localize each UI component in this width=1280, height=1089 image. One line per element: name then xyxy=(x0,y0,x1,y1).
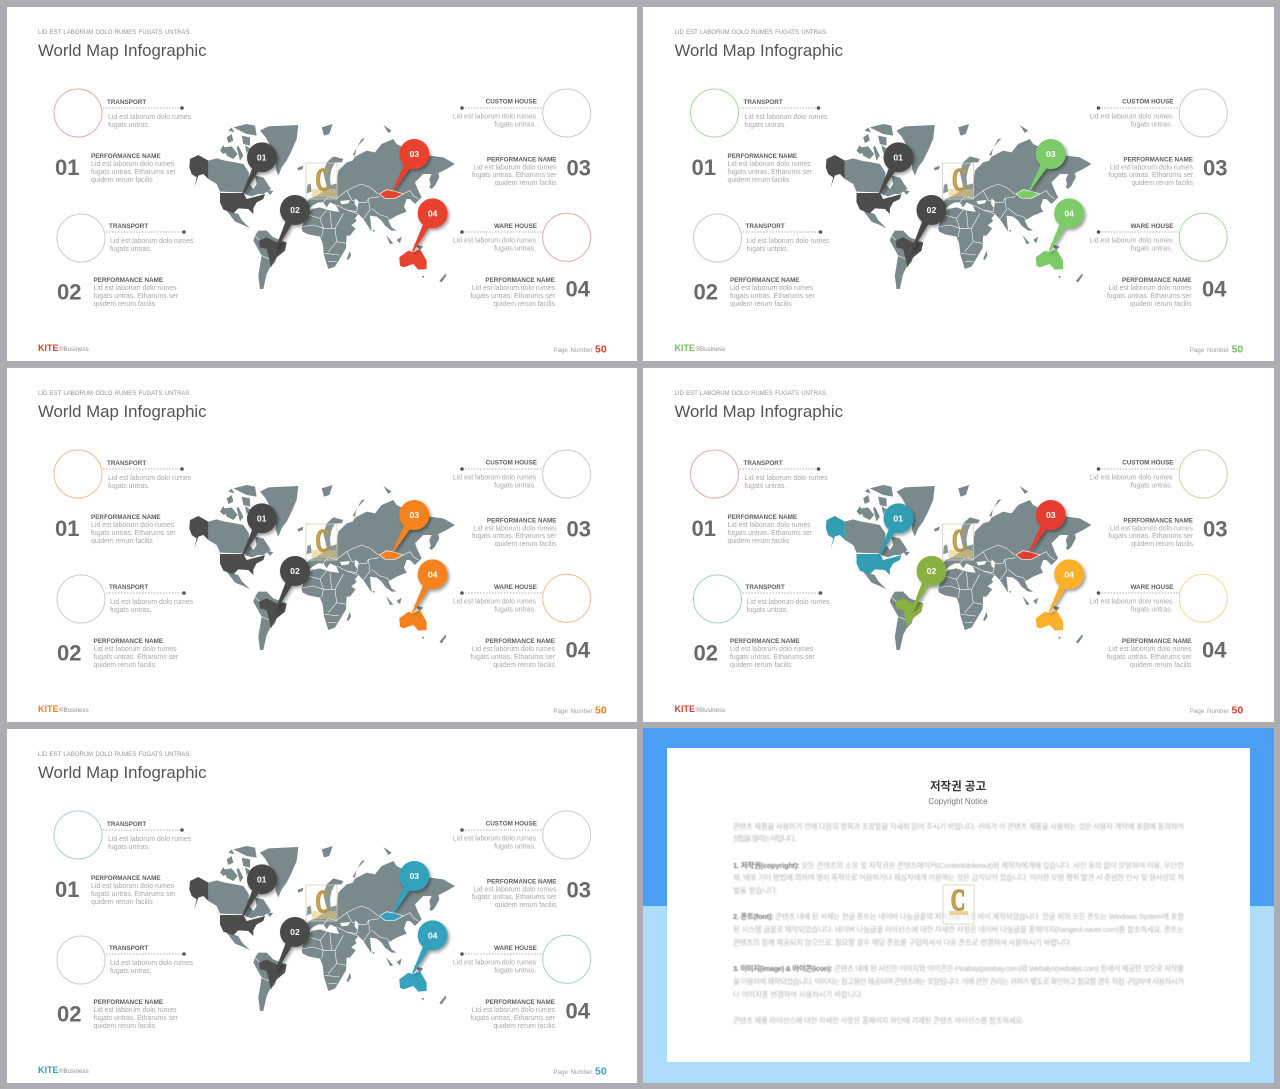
block: performance 02: Lid est laborum dolo rumes xyxy=(94,285,177,292)
block: performance 03: PERFORMANCE NAME xyxy=(1123,518,1193,524)
page number xyxy=(553,344,607,356)
callout: transport 2: fugats untras. xyxy=(110,246,152,253)
block: performance 02: quidem rerum facilis xyxy=(94,301,156,308)
callout: ware house: Lid est laborum dolo rumes xyxy=(453,960,537,967)
callout: transport 2: Lid est laborum dolo rumes xyxy=(110,599,194,606)
block: performance 03 xyxy=(472,156,591,187)
block: performance 01: PERFORMANCE NAME xyxy=(728,514,797,521)
title: World Map Infographic xyxy=(674,402,843,421)
callout: ware house: WARE HOUSE xyxy=(494,945,537,952)
block: performance 04: Lid est laborum dolo rumes xyxy=(1108,285,1192,292)
page number: 50 xyxy=(595,1066,607,1078)
block: performance 02: 02 xyxy=(694,280,718,304)
callout: ware house: fugats untras. xyxy=(494,246,536,252)
callout: transport 1 xyxy=(54,89,192,137)
block: performance 03: 03 xyxy=(1203,156,1227,180)
callout: ware house: Lid est laborum dolo rumes xyxy=(453,238,537,245)
callout: ware house: fugats untras. xyxy=(1131,246,1173,252)
footer brand: KITE xyxy=(38,704,59,714)
callout: ware house: fugats untras. xyxy=(1131,606,1173,614)
callout: transport 2: Lid est laborum dolo rumes xyxy=(746,238,830,245)
block: performance 03: fugats untras. Etharums ser xyxy=(472,894,557,901)
block: performance 04: quidem rerum facilis xyxy=(493,301,556,308)
callout: transport 2 xyxy=(694,575,830,623)
footer brand xyxy=(674,704,725,714)
notice text: 제, 배포 기타 방법에 의하여 영리 목적으로 이용하거나 제삼자에게 이용하는 것은 금지되어 있습니다. 이러한 모방 행위 발견 시 준엄한 민사 및 형사상의 처 xyxy=(733,873,1184,882)
world map with pins: 01 xyxy=(893,513,903,523)
block: performance 03: 03 xyxy=(566,878,591,902)
callout: transport 1: Lid est laborum dolo rumes xyxy=(744,475,828,482)
callout: transport 2: TRANSPORT xyxy=(109,584,148,591)
callout: custom house xyxy=(453,89,591,137)
callout: transport 1: Lid est laborum dolo rumes xyxy=(744,114,828,121)
block: performance 01 xyxy=(692,514,813,545)
world map with pins: 02 xyxy=(290,205,300,215)
block: performance 04: 04 xyxy=(566,276,591,302)
callout: ware house xyxy=(453,574,591,622)
block: performance 04 xyxy=(1107,276,1227,308)
block: performance 03: Lid est laborum dolo rumes xyxy=(473,526,557,532)
block: performance 03: 03 xyxy=(566,156,591,180)
page number xyxy=(553,704,607,716)
block: performance 03: PERFORMANCE NAME xyxy=(487,518,556,524)
notice text: 콘텐츠 제품 라이선스에 대한 자세한 사항은 홈페이지 하단에 기재된 콘텐츠 라이선스를 참조하세요. xyxy=(733,1016,1024,1025)
block: performance 01: 01 xyxy=(55,877,79,902)
world map with pins: 03 xyxy=(1046,510,1056,520)
callout: transport 1 xyxy=(690,89,828,137)
block: performance 03: quidem rerum facilis xyxy=(1131,180,1194,187)
block: performance 02 xyxy=(694,638,815,669)
block: performance 04: 04 xyxy=(566,638,591,662)
block: performance 03 xyxy=(472,878,591,909)
block: performance 01: 01 xyxy=(55,516,79,541)
watermark: C xyxy=(952,522,966,558)
block: performance 01: fugats untras. Etharums ser xyxy=(728,169,813,176)
block: performance 02 xyxy=(57,999,179,1030)
watermark xyxy=(942,161,974,199)
title: World Map Infographic xyxy=(38,763,207,782)
callout: ware house: Lid est laborum dolo rumes xyxy=(1089,599,1173,606)
footer brand xyxy=(38,1065,89,1075)
callout: transport 1: fugats untras. xyxy=(744,122,786,129)
block: performance 01: quidem rerum facilis xyxy=(728,538,790,545)
page number xyxy=(553,1066,607,1078)
block: performance 04: 04 xyxy=(1202,638,1227,662)
block: performance 04: PERFORMANCE NAME xyxy=(485,638,555,645)
block: performance 01 xyxy=(55,153,176,184)
block: performance 03 xyxy=(472,516,591,548)
block: performance 02: quidem rerum facilis xyxy=(730,301,792,308)
block: performance 01: fugats untras. Etharums ser xyxy=(91,169,176,176)
block: performance 01: PERFORMANCE NAME xyxy=(728,153,797,160)
callout: ware house: Lid est laborum dolo rumes xyxy=(1089,238,1173,245)
notice text: 성립을 알리는 바입니다. xyxy=(733,834,796,843)
block: performance 02: PERFORMANCE NAME xyxy=(730,638,800,645)
callout: custom house xyxy=(1089,450,1227,498)
callout: custom house: CUSTOM HOUSE xyxy=(486,460,537,466)
block: performance 02: Lid est laborum dolo rumes xyxy=(94,1007,177,1014)
title: World Map Infographic xyxy=(674,41,843,60)
panel: slide 2 green xyxy=(643,7,1274,361)
page number xyxy=(1190,704,1243,716)
footer brand: ®Business xyxy=(59,346,89,353)
block: performance 03: PERFORMANCE NAME xyxy=(1123,156,1193,164)
block: performance 03: PERFORMANCE NAME xyxy=(487,878,556,886)
block: performance 01: PERFORMANCE NAME xyxy=(91,875,161,882)
block: performance 03: 03 xyxy=(1203,516,1227,542)
world map with pins: 02 xyxy=(290,927,300,937)
world map with pins xyxy=(189,124,455,289)
callout: custom house: CUSTOM HOUSE xyxy=(1122,98,1174,106)
block: performance 02: PERFORMANCE NAME xyxy=(730,277,800,284)
notice text: 2. 폰트(font): 콘텐츠 내에 된 서체는 한글 폰트는 네이버 나눔글꼴의 저작권을 가진 바이 제작되었습니다. 한글 외의 모든 폰트는 Windows System에 포함 xyxy=(733,912,1184,921)
callout: custom house xyxy=(453,811,591,859)
callout: ware house xyxy=(1089,574,1227,622)
callout: transport 2: fugats untras. xyxy=(110,607,152,614)
callout: transport 1 xyxy=(690,450,828,498)
footer brand: ®Business xyxy=(696,346,725,353)
footer brand: KITE xyxy=(38,1065,59,1075)
block: performance 04: fugats untras. Etharums ser xyxy=(470,654,556,661)
callout: transport 2: Lid est laborum dolo rumes xyxy=(110,960,194,967)
footer brand xyxy=(38,704,89,714)
page number: 50 xyxy=(1232,344,1243,356)
callout: transport 1: TRANSPORT xyxy=(107,821,146,828)
callout: transport 2 xyxy=(694,214,830,262)
subtitle: LID EST LABORUM DOLO RUMES FUGATS UNTRAS. xyxy=(674,391,828,397)
watermark: C xyxy=(316,883,329,919)
callout: custom house: fugats untras. xyxy=(494,482,536,490)
callout: custom house: Lid est laborum dolo rumes xyxy=(453,474,537,482)
heading: 저작권 공고 xyxy=(930,779,986,793)
block: performance 04: Lid est laborum dolo rumes xyxy=(472,285,556,292)
callout: transport 1: fugats untras. xyxy=(108,844,150,851)
block: performance 02: Lid est laborum dolo rumes xyxy=(730,285,814,292)
footer brand: ®Business xyxy=(59,707,89,714)
block: performance 01: fugats untras. Etharums ser xyxy=(91,891,176,898)
callout: transport 1: fugats untras. xyxy=(744,483,786,490)
world map with pins: 01 xyxy=(893,152,903,162)
world map with pins: 01 xyxy=(257,152,267,162)
block: performance 04: 04 xyxy=(566,998,591,1024)
block: performance 01: Lid est laborum dolo rumes xyxy=(91,883,175,890)
callout: transport 2: fugats untras. xyxy=(746,246,788,253)
notice text: 3. 이미지(image) & 아이콘(icon): 콘텐츠 내에 된 사진은 이미지와 아이콘은 Pixabay(pixabay.com)와 Webalys(webalys.com) 등에서 제공한 것으로 저작물 xyxy=(733,964,1184,973)
callout: transport 1: fugats untras. xyxy=(108,122,150,129)
title: World Map Infographic xyxy=(38,402,207,421)
block: performance 01: Lid est laborum dolo rumes xyxy=(728,161,811,168)
callout: ware house: WARE HOUSE xyxy=(494,584,537,591)
block: performance 02 xyxy=(694,277,815,308)
notice text: 콘텐츠 제품을 사용하기 전에 다음의 항목과 조항들을 자세히 읽어 주시기 바랍니다. 귀하가 이 콘텐츠 제품을 사용하는 것은 사용자 계약에 포함에 동의하여 xyxy=(733,822,1184,831)
footer brand: ®Business xyxy=(696,707,725,714)
block: performance 04: quidem rerum facilis xyxy=(493,1023,556,1030)
block: performance 03: Lid est laborum dolo rumes xyxy=(1110,164,1194,172)
block: performance 01: Lid est laborum dolo rumes xyxy=(728,522,811,529)
notice text: 나 이미지를 변경하여 사용하시기 바랍니다. xyxy=(733,990,863,999)
callout: transport 1: Lid est laborum dolo rumes xyxy=(108,836,192,843)
block: performance 02 xyxy=(57,638,179,669)
page number: Page Number xyxy=(1190,708,1229,715)
callout: custom house: fugats untras. xyxy=(494,844,536,850)
callout: transport 2: Lid est laborum dolo rumes xyxy=(746,599,830,606)
page number: Page Number xyxy=(553,708,592,715)
callout: transport 2 xyxy=(57,214,194,262)
panel: slide 4 multicolour xyxy=(643,368,1274,722)
watermark xyxy=(306,883,337,921)
watermark xyxy=(943,883,974,924)
callout: custom house xyxy=(1089,89,1227,137)
block: performance 02: PERFORMANCE NAME xyxy=(94,638,163,645)
block: performance 03: fugats untras. Etharums ser xyxy=(1108,533,1194,540)
callout: custom house: fugats untras. xyxy=(1131,122,1173,128)
block: performance 01: Lid est laborum dolo rumes xyxy=(91,522,175,529)
block: performance 02: quidem rerum facilis xyxy=(94,1023,156,1030)
notice text: 벌을 받습니다. xyxy=(733,886,778,895)
block: performance 02: fugats untras. Etharums ser xyxy=(94,654,179,661)
block: performance 02: 02 xyxy=(57,640,81,666)
world map with pins: 03 xyxy=(409,510,419,520)
block: performance 02: fugats untras. Etharums ser xyxy=(94,1015,179,1022)
subtitle: LID EST LABORUM DOLO RUMES FUGATS UNTRAS. xyxy=(38,30,191,36)
callout: transport 2 xyxy=(57,936,194,984)
block: performance 04: quidem rerum facilis xyxy=(1130,662,1192,669)
callout: ware house: WARE HOUSE xyxy=(494,223,537,230)
notice text: 을 이용하여 제작되었습니다. 이미지는 참고용만 제공되며 콘텐츠에는 포함됩니다. 이에 관한 권리는 귀하가 별도로 확인하고 필요할 경우 직접 구입하여 사용하시거 xyxy=(733,977,1184,986)
world map with pins: 04 xyxy=(428,930,438,940)
watermark xyxy=(306,522,337,560)
callout: transport 1: fugats untras. xyxy=(108,483,150,490)
world map with pins: 03 xyxy=(409,149,419,159)
callout: custom house: Lid est laborum dolo rumes xyxy=(1089,114,1173,120)
block: performance 03: quidem rerum facilis xyxy=(1131,541,1194,548)
callout: custom house: CUSTOM HOUSE xyxy=(1122,460,1174,466)
callout: ware house: fugats untras. xyxy=(494,606,536,614)
world map with pins: 01 xyxy=(257,513,267,523)
callout: transport 2: TRANSPORT xyxy=(109,223,148,230)
block: performance 01: 01 xyxy=(692,155,716,180)
block: performance 02: PERFORMANCE NAME xyxy=(94,999,163,1006)
callout: transport 1: TRANSPORT xyxy=(744,99,783,106)
callout: custom house: fugats untras. xyxy=(1131,482,1173,490)
subtitle: LID EST LABORUM DOLO RUMES FUGATS UNTRAS. xyxy=(38,391,191,397)
world map with pins: 04 xyxy=(1064,569,1074,579)
block: performance 04 xyxy=(470,638,591,669)
block: performance 01: Lid est laborum dolo rumes xyxy=(91,161,175,168)
world map with pins: 02 xyxy=(927,205,936,215)
callout: ware house: WARE HOUSE xyxy=(1130,584,1174,591)
block: performance 02: PERFORMANCE NAME xyxy=(94,277,163,284)
world map with pins: 04 xyxy=(428,208,438,218)
panel: slide 3 orange xyxy=(7,368,637,722)
block: performance 04: PERFORMANCE NAME xyxy=(485,999,555,1006)
block: performance 04 xyxy=(470,276,591,308)
callout: transport 2: fugats untras. xyxy=(746,607,788,614)
watermark: C xyxy=(951,883,965,917)
callout: custom house: Lid est laborum dolo rumes xyxy=(453,114,537,120)
callout: transport 2: TRANSPORT xyxy=(746,584,785,591)
page number: Page Number xyxy=(553,1069,592,1076)
block: performance 01: PERFORMANCE NAME xyxy=(91,514,161,521)
world map with pins: 02 xyxy=(290,566,300,576)
block: performance 02: fugats untras. Etharums ser xyxy=(730,293,815,300)
callout: ware house xyxy=(453,935,591,983)
block: performance 02: 02 xyxy=(57,280,81,304)
block: performance 01: fugats untras. Etharums ser xyxy=(91,530,176,537)
notice text xyxy=(733,822,1184,1025)
callout: transport 1: Lid est laborum dolo rumes xyxy=(108,114,192,121)
block: performance 02: fugats untras. Etharums ser xyxy=(730,654,815,661)
block: performance 04: Lid est laborum dolo rumes xyxy=(472,1007,556,1014)
callout: custom house xyxy=(453,450,591,498)
callout: custom house: CUSTOM HOUSE xyxy=(486,820,537,828)
block: performance 01: 01 xyxy=(692,516,716,541)
page number: Page Number xyxy=(553,347,592,354)
panel: slide 1 red xyxy=(7,7,637,361)
world map with pins: 04 xyxy=(1064,208,1074,218)
panel: copyright notice xyxy=(643,728,1274,1083)
block: performance 04: quidem rerum facilis xyxy=(493,662,556,669)
block: performance 04 xyxy=(470,998,591,1030)
callout: custom house: CUSTOM HOUSE xyxy=(486,98,537,106)
block: performance 03: quidem rerum facilis xyxy=(495,541,557,548)
callout: transport 1 xyxy=(54,450,192,498)
callout: transport 1: TRANSPORT xyxy=(744,460,783,467)
block: performance 04: fugats untras. Etharums ser xyxy=(1107,654,1192,661)
world map with pins xyxy=(189,846,455,1011)
block: performance 03: Lid est laborum dolo rumes xyxy=(473,164,557,172)
watermark xyxy=(306,161,337,199)
footer brand: KITE xyxy=(674,343,695,353)
callout: transport 2 xyxy=(57,575,194,623)
world map with pins: 02 xyxy=(927,566,936,576)
page number: 50 xyxy=(1232,704,1243,716)
block: performance 02: 02 xyxy=(694,640,718,666)
block: performance 02: 02 xyxy=(57,1002,81,1026)
block: performance 03 xyxy=(1108,156,1227,187)
world map with pins: 04 xyxy=(428,569,438,579)
world map with pins: 03 xyxy=(409,871,419,881)
world map with pins: 01 xyxy=(257,874,267,884)
callout: transport 1: TRANSPORT xyxy=(107,460,146,467)
block: performance 01 xyxy=(55,514,176,545)
world map with pins xyxy=(189,485,455,650)
page number: Page Number xyxy=(1190,347,1229,354)
block: performance 02: fugats untras. Etharums ser xyxy=(94,293,179,300)
block: performance 01: 01 xyxy=(55,155,79,180)
block: performance 01: quidem rerum facilis xyxy=(91,899,153,906)
callout: ware house: WARE HOUSE xyxy=(1130,223,1174,230)
callout: transport 2: Lid est laborum dolo rumes xyxy=(110,238,194,245)
block: performance 03: quidem rerum facilis xyxy=(495,902,557,909)
notice text: 콘텐츠의 함께 제공되지 않으므로, 필요할 경우 해당 폰트를 구입하셔서 다운 폰트로 변경하여 사용하시기 바랍니다. xyxy=(733,938,1072,947)
callout: transport 2: TRANSPORT xyxy=(109,945,148,952)
notice text: 1. 저작권(copyright): 모든 콘텐츠의 소유 및 저작권은 콘텐츠메이커(Contentstokeout)와 제작자에게에 있습니다. 사전 동의 없이 모방하여 이용, 무단전 xyxy=(733,861,1184,870)
block: performance 03: fugats untras. Etharums ser xyxy=(472,533,557,540)
block: performance 04: PERFORMANCE NAME xyxy=(1122,277,1192,284)
block: performance 03: PERFORMANCE NAME xyxy=(487,156,556,164)
page number xyxy=(1190,344,1243,356)
world map with pins xyxy=(826,485,1091,650)
block: performance 04: Lid est laborum dolo rumes xyxy=(1108,646,1192,653)
world map with pins xyxy=(826,124,1091,289)
callout: ware house xyxy=(1089,213,1227,261)
panel: slide 5 teal xyxy=(7,729,637,1083)
title: World Map Infographic xyxy=(38,41,207,60)
block: performance 01: quidem rerum facilis xyxy=(728,177,790,184)
footer brand: KITE xyxy=(674,704,695,714)
block: performance 01: fugats untras. Etharums ser xyxy=(728,530,813,537)
block: performance 03: Lid est laborum dolo rumes xyxy=(473,886,557,894)
footer brand: KITE xyxy=(38,343,59,353)
block: performance 03: fugats untras. Etharums ser xyxy=(472,172,557,179)
watermark: C xyxy=(316,522,329,558)
callout: transport 2: TRANSPORT xyxy=(746,223,785,230)
callout: ware house: Lid est laborum dolo rumes xyxy=(453,599,537,606)
footer brand xyxy=(38,343,89,353)
block: performance 02 xyxy=(57,277,179,308)
subheading: Copyright Notice xyxy=(928,797,988,806)
footer brand: ®Business xyxy=(59,1068,89,1075)
callout: ware house: fugats untras. xyxy=(494,968,536,974)
block: performance 01: PERFORMANCE NAME xyxy=(91,153,161,160)
subtitle: LID EST LABORUM DOLO RUMES FUGATS UNTRAS. xyxy=(38,752,191,758)
callout: custom house: Lid est laborum dolo rumes xyxy=(1089,474,1173,482)
callout: custom house: Lid est laborum dolo rumes xyxy=(453,836,537,842)
subtitle: LID EST LABORUM DOLO RUMES FUGATS UNTRAS. xyxy=(674,30,828,36)
callout: transport 1: Lid est laborum dolo rumes xyxy=(108,475,192,482)
block: performance 02: quidem rerum facilis xyxy=(730,662,792,669)
world map with pins: 03 xyxy=(1046,149,1056,159)
block: performance 01: quidem rerum facilis xyxy=(91,177,153,184)
watermark: C xyxy=(316,161,329,197)
block: performance 03: 03 xyxy=(566,516,591,542)
block: performance 04: PERFORMANCE NAME xyxy=(1122,638,1192,645)
block: performance 03: Lid est laborum dolo rumes xyxy=(1110,526,1194,532)
block: performance 04: quidem rerum facilis xyxy=(1130,301,1192,308)
block: performance 01 xyxy=(692,153,813,184)
notice text: 된 시스템 글꼴로 제작되었습니다. 네이버 나눔글꼴 라이선스에 대한 자세한 사항은 네이버 나눔글꼴 홈페이지(hangeul.naver.com)를 참조하세요. 폰트는 xyxy=(733,925,1184,934)
block: performance 04: fugats untras. Etharums ser xyxy=(470,293,556,300)
block: performance 04: fugats untras. Etharums ser xyxy=(470,1015,556,1022)
block: performance 02: quidem rerum facilis xyxy=(94,662,156,669)
block: performance 01 xyxy=(55,875,176,906)
block: performance 04: fugats untras. Etharums ser xyxy=(1107,293,1192,300)
callout: custom house: fugats untras. xyxy=(494,122,536,128)
block: performance 02: Lid est laborum dolo rumes xyxy=(730,646,814,653)
callout: transport 2: fugats untras. xyxy=(110,968,152,975)
watermark: C xyxy=(952,161,966,197)
block: performance 04 xyxy=(1107,638,1227,669)
block: performance 03: quidem rerum facilis xyxy=(495,180,557,187)
block: performance 04: 04 xyxy=(1202,276,1227,302)
block: performance 01: quidem rerum facilis xyxy=(91,538,153,545)
block: performance 03 xyxy=(1108,516,1227,548)
block: performance 03: fugats untras. Etharums ser xyxy=(1108,172,1194,179)
watermark xyxy=(942,522,974,560)
callout: ware house xyxy=(453,213,591,261)
block: performance 04: Lid est laborum dolo rumes xyxy=(472,646,556,653)
footer brand xyxy=(674,343,725,353)
block: performance 04: PERFORMANCE NAME xyxy=(485,277,555,284)
page number: 50 xyxy=(595,704,607,716)
page number: 50 xyxy=(595,344,607,356)
block: performance 02: Lid est laborum dolo rumes xyxy=(94,646,177,653)
callout: transport 1 xyxy=(54,811,192,859)
callout: transport 1: TRANSPORT xyxy=(107,99,146,106)
